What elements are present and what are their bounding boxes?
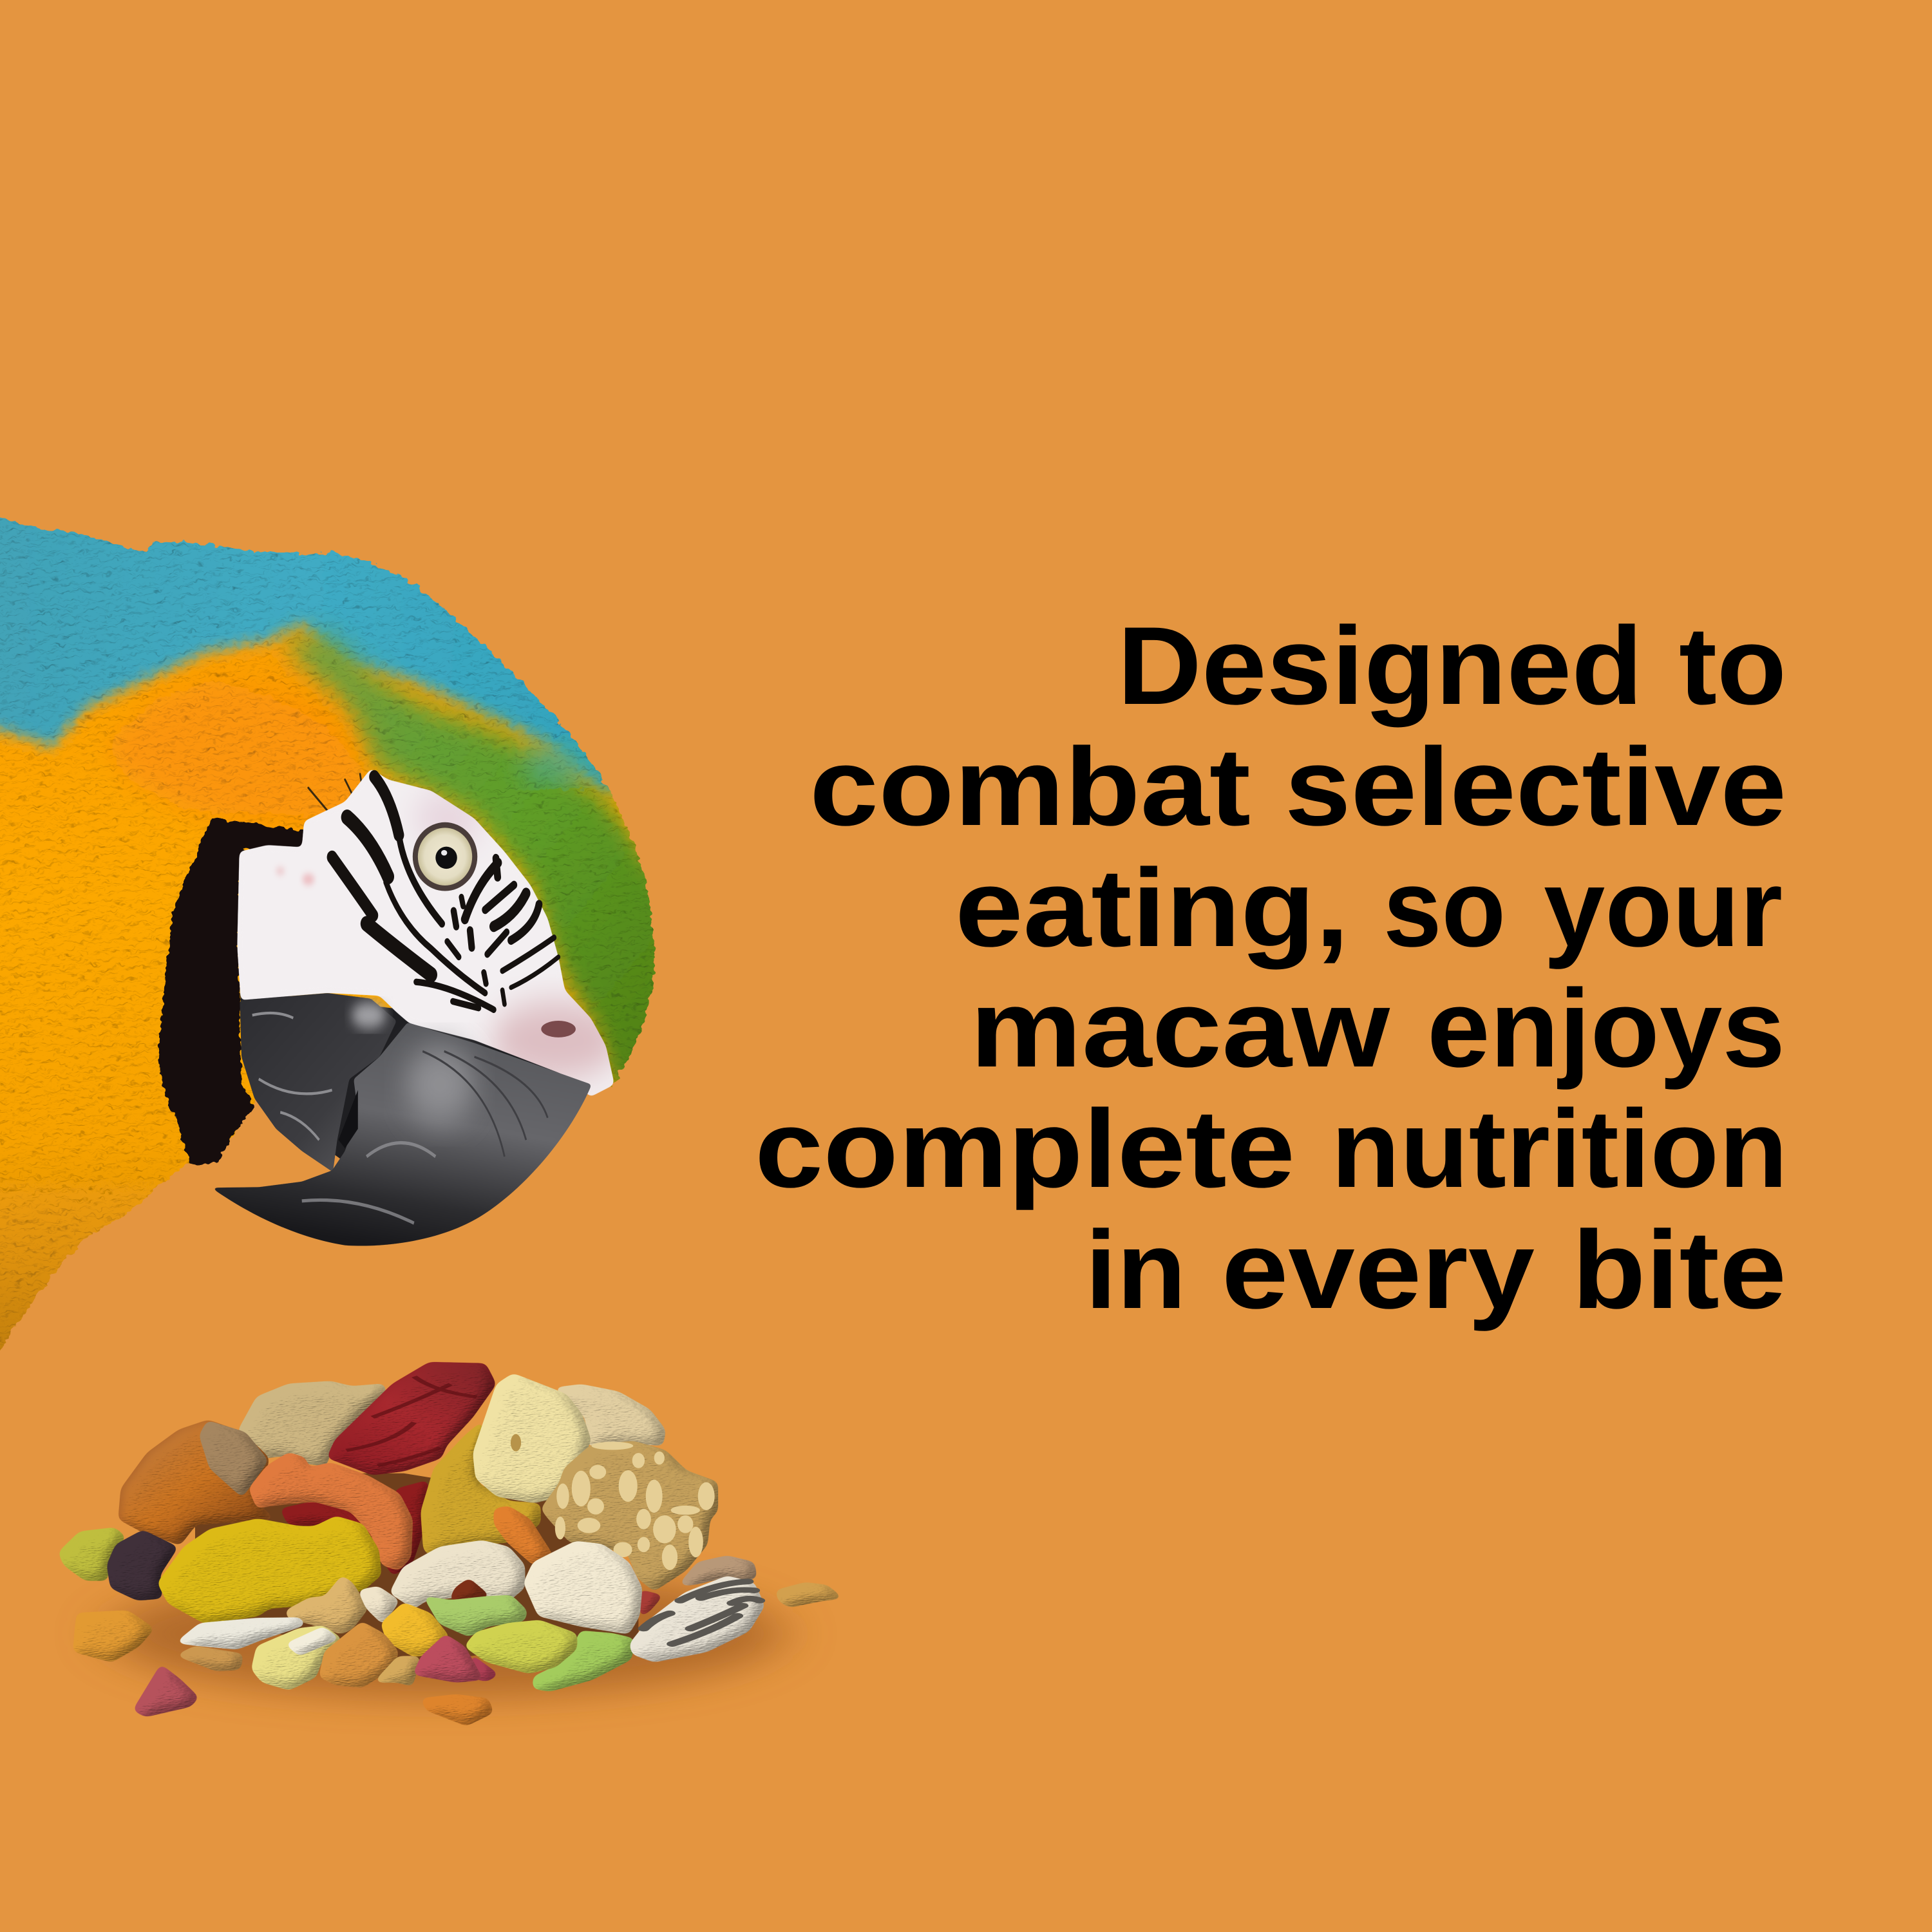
nostril xyxy=(541,1021,576,1037)
hazelnut xyxy=(120,1420,273,1544)
headline text: macaw xyxy=(970,967,1390,1090)
food shadow xyxy=(106,1570,784,1698)
sunflower seed streaks xyxy=(643,1582,759,1644)
pistachio xyxy=(391,1540,524,1608)
dark pile base xyxy=(195,1473,638,1664)
headline text: so xyxy=(1383,846,1506,970)
mustard chunk xyxy=(422,1423,540,1555)
headline text: Designed xyxy=(1117,604,1643,728)
orange fig xyxy=(250,1453,412,1570)
pink triangle crumb xyxy=(134,1665,198,1716)
dark dried fruit xyxy=(281,1481,427,1575)
sunflower seed xyxy=(630,1577,764,1662)
headline text: eating, xyxy=(955,846,1349,970)
crest feather tips xyxy=(308,774,363,824)
corn xyxy=(382,1603,448,1656)
headline text: in xyxy=(1085,1208,1186,1332)
green crumb xyxy=(424,1595,526,1636)
seed ball xyxy=(542,1441,717,1591)
headline text: nutrition xyxy=(1331,1087,1788,1211)
red bit xyxy=(641,1591,662,1616)
pepper folds xyxy=(346,1376,477,1466)
headline text: combat xyxy=(810,725,1251,849)
illustration: macaw head xyxy=(0,518,656,1351)
corn kernel top xyxy=(287,1627,339,1655)
illustration: pile of seeds, nuts and dried fruit xyxy=(59,1363,842,1725)
headline text xyxy=(755,604,1788,1332)
tan crumb xyxy=(375,1656,419,1686)
white nut xyxy=(359,1587,399,1624)
hazelnut cap xyxy=(200,1421,267,1496)
dark plum xyxy=(108,1531,177,1600)
orange strip xyxy=(495,1506,553,1565)
pale chunk xyxy=(287,1577,367,1634)
beak underlay xyxy=(240,990,582,1162)
almond xyxy=(555,1385,665,1446)
headline text: to xyxy=(1679,604,1786,728)
orange cube xyxy=(320,1622,397,1687)
bean xyxy=(681,1556,756,1586)
orange crumb bottom xyxy=(422,1695,493,1725)
headline text: every xyxy=(1222,1208,1535,1332)
headline text: bite xyxy=(1572,1208,1786,1332)
red raisin xyxy=(451,1579,490,1600)
banana dimple xyxy=(511,1434,521,1452)
corn kernel xyxy=(252,1626,341,1690)
yellow green crumb xyxy=(465,1620,576,1673)
white seed xyxy=(177,1618,305,1649)
upper beak xyxy=(211,1023,592,1246)
facial stripes xyxy=(332,777,558,1010)
tan crumb right xyxy=(777,1583,842,1607)
orange crumb left xyxy=(74,1611,153,1662)
red pepper xyxy=(328,1363,495,1475)
headline text: complete xyxy=(755,1087,1295,1211)
seed ball oats xyxy=(555,1442,715,1570)
headline text: enjoys xyxy=(1427,967,1785,1090)
white facial skin xyxy=(237,770,614,1096)
headline text: your xyxy=(1544,846,1783,970)
eye xyxy=(413,822,477,891)
white ball xyxy=(525,1542,641,1634)
pink crumb small xyxy=(471,1655,498,1681)
black cheek patch xyxy=(157,819,378,1164)
yellow lump xyxy=(158,1517,380,1624)
peanut xyxy=(240,1381,386,1466)
headline text: selective xyxy=(1285,725,1786,849)
pink crumb xyxy=(414,1635,482,1682)
lower mandible xyxy=(240,993,397,1172)
green yellow crumb xyxy=(59,1528,125,1580)
plumage: body, crown and forehead feathers xyxy=(0,518,656,1351)
tan crumb left xyxy=(177,1647,242,1671)
banana chip xyxy=(474,1374,590,1502)
green leaf crumb xyxy=(534,1631,633,1691)
